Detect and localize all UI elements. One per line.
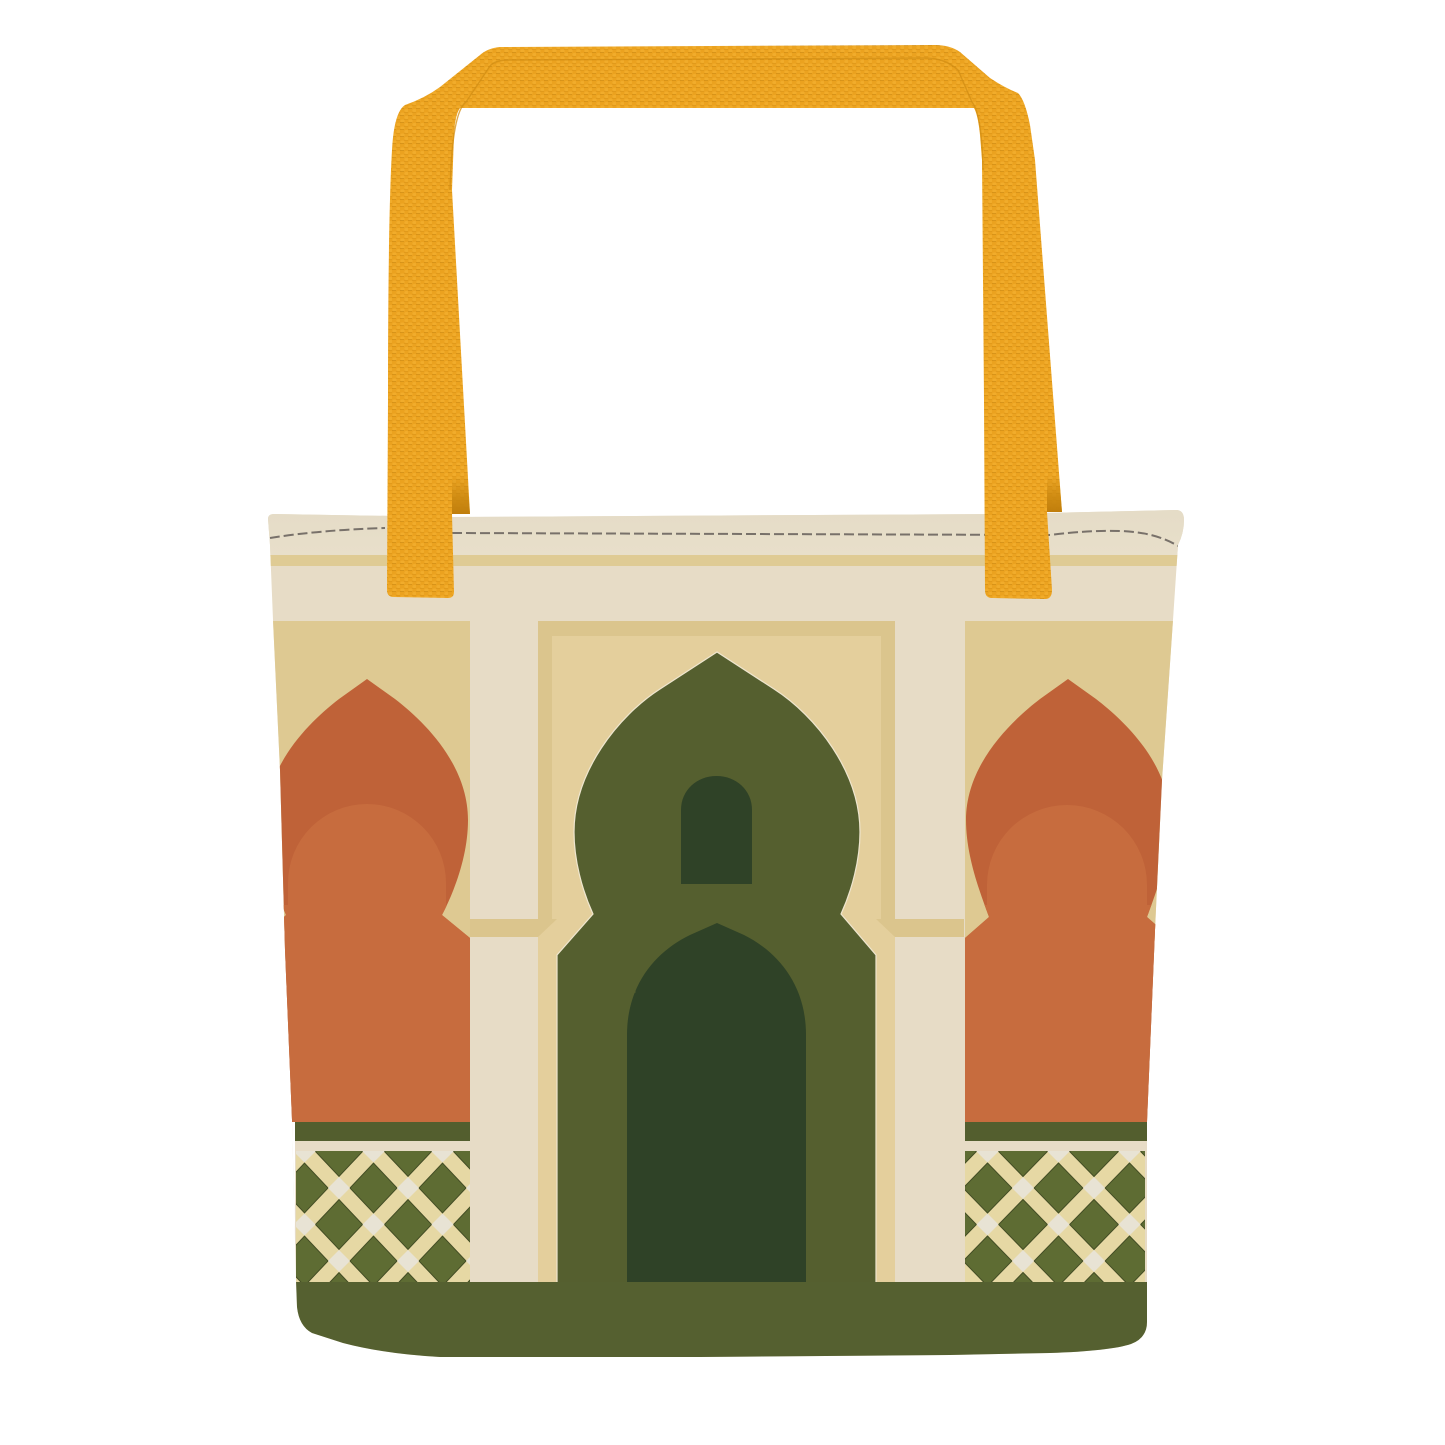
dark orange arch fill xyxy=(280,679,470,1122)
right green band xyxy=(965,1122,1155,1141)
left tan panel xyxy=(273,621,470,941)
central niche light panel xyxy=(538,621,895,1286)
lattice band above xyxy=(295,1141,470,1152)
right orange arch xyxy=(965,679,1162,1122)
right lower pillar xyxy=(896,938,964,1282)
left green band xyxy=(295,1122,470,1141)
right pillar capital band xyxy=(876,919,964,937)
left lower pillar xyxy=(470,938,537,1282)
lower dark doorway xyxy=(627,923,806,1282)
tote bag body xyxy=(250,500,1200,1372)
central green keyhole arch xyxy=(557,652,876,1284)
left lattice xyxy=(285,1122,470,1287)
right upper pillar xyxy=(895,566,965,919)
beige fabric base xyxy=(250,500,1200,1370)
tan hem stripe xyxy=(250,555,1200,566)
top hem xyxy=(268,510,1184,555)
stitching line xyxy=(270,528,1178,546)
lattice weave xyxy=(965,1151,1145,1282)
olive base panel xyxy=(296,1282,1147,1357)
handle strap xyxy=(387,45,1062,599)
left pillar capital band xyxy=(470,919,557,937)
yellow handles xyxy=(387,45,1062,599)
dark orange arch fill xyxy=(965,679,1162,1122)
upper dark window xyxy=(681,776,752,884)
right strap back shadow xyxy=(1047,475,1062,512)
lattice band above xyxy=(965,1141,1155,1152)
left strap back shadow xyxy=(452,475,470,514)
white clearance beside lattice xyxy=(292,1122,295,1232)
left orange arch xyxy=(280,679,470,1122)
right tan panel xyxy=(965,621,1195,941)
lighter inner arch xyxy=(284,804,470,1122)
niche dark frame xyxy=(538,621,895,919)
lighter inner arch xyxy=(965,805,1156,1122)
right lattice xyxy=(965,1151,1145,1282)
lattice weave xyxy=(296,1151,470,1282)
left upper pillar xyxy=(470,566,538,919)
strap stitch seams xyxy=(450,58,983,190)
